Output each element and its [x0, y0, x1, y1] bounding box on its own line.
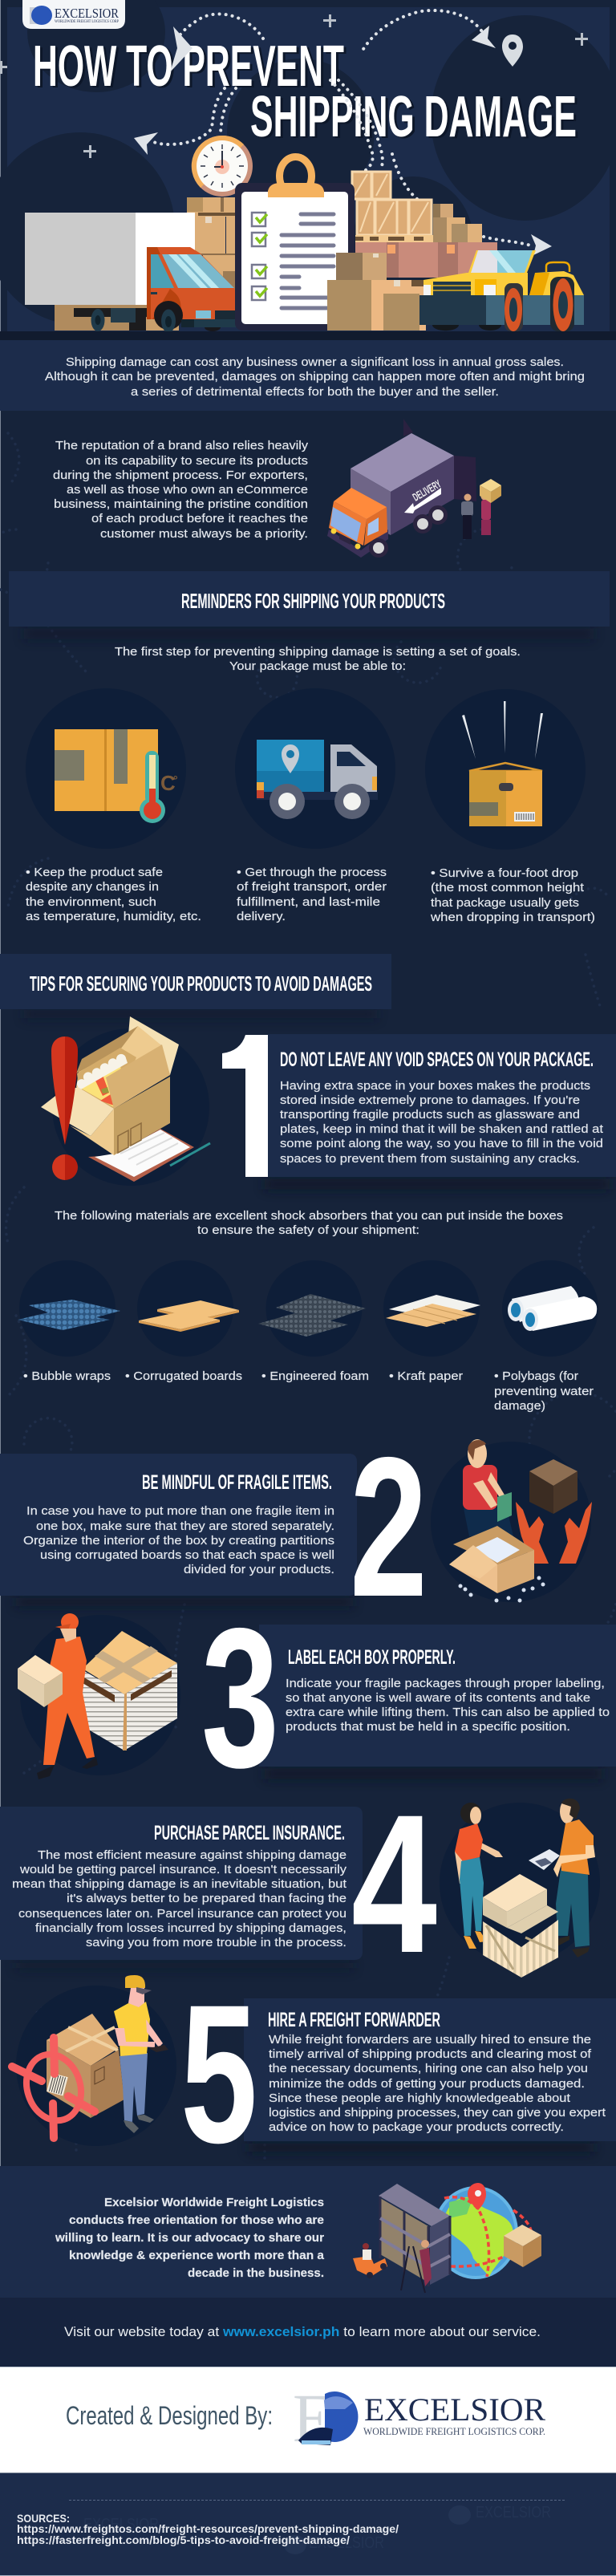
route dashes	[444, 2197, 532, 2277]
tip 2 body: using corrugated boards so that each space is well	[40, 1548, 334, 1562]
ladder and worker	[401, 2240, 432, 2293]
text block: first step	[115, 645, 521, 673]
title	[33, 34, 577, 149]
tip 1 body: spaces to prevent them from sustaining any cracks.	[280, 1152, 580, 1166]
goal 3 text: that package usually gets	[431, 896, 579, 910]
advocacy text: knowledge & experience worth more than a	[69, 2249, 325, 2262]
tip 5 body: advice on how to package your products correctly.	[269, 2120, 564, 2134]
goal 3: drop test	[425, 689, 586, 850]
panel: tip 1	[222, 1034, 616, 1177]
open box	[41, 1016, 179, 1155]
source links: https://fasterfreight.com/blog/5-tips-to-avoid-freight-damage/	[17, 2534, 350, 2546]
forklift	[353, 2243, 387, 2278]
goal 2: freight transport	[235, 688, 395, 849]
watermark logos	[83, 2504, 551, 2554]
hero background	[7, 7, 610, 331]
intro text	[45, 355, 585, 399]
red target reticle	[12, 2038, 95, 2138]
tip 4 body: consequences later on. Parcel insurance can protect you	[18, 1907, 346, 1921]
panel: reminders heading	[9, 571, 610, 627]
icon: box with thermometer	[55, 729, 178, 823]
cardboard box	[47, 2014, 124, 2118]
material: polybags: • Polybags (for	[494, 1369, 578, 1383]
tip 4 body: saving you from more trouble in the process.	[86, 1936, 346, 1949]
material: bubble wraps	[18, 1260, 120, 1383]
tip 3 body: Indicate your fragile packages through proper labeling,	[286, 1677, 605, 1690]
text block: brand reputation	[53, 439, 309, 541]
tip 4 body: mean that shipping damage is an inevitable situation, but	[12, 1877, 347, 1891]
tip 3 body: extra care while lifting them. This can also be applied to	[286, 1706, 610, 1719]
pallet	[55, 305, 179, 331]
tip 5 body: While freight forwarders are usually hired to ensure the	[269, 2033, 591, 2047]
tip 1 body: Having extra space in your boxes makes the products	[280, 1079, 590, 1093]
orange worker	[37, 1613, 98, 1779]
wooden crate	[483, 1874, 558, 1978]
crates right	[352, 172, 497, 278]
goal 2 text	[237, 866, 387, 923]
text block: materials intro	[55, 1209, 563, 1237]
intro text: a series of detrimental effects for both the buyer and the seller.	[131, 385, 499, 399]
clipboard and pencil	[88, 1129, 210, 1182]
advocacy text: Excelsior Worldwide Freight Logistics	[104, 2196, 324, 2209]
panel: visit website: Visit our website today at www.excelsior.ph to learn more about our service.	[64, 2324, 541, 2339]
foreground boxes	[327, 253, 426, 331]
tip 2 body	[23, 1504, 334, 1576]
brown box	[529, 1459, 578, 1514]
goal 2 text: fulfillment, and last-mile	[237, 895, 380, 909]
tip 1 body: plates, keep in mind that it will be shaken and rattled at	[280, 1122, 604, 1136]
tip 4 body: it's always better to be prepared than facing the	[67, 1892, 346, 1905]
panel: tip 5	[244, 1998, 616, 2141]
illustration: warehouse and globe	[353, 2183, 541, 2293]
checklist boxes	[252, 213, 265, 300]
tip 5 body: minimize the odds of getting your products damaged.	[269, 2077, 585, 2091]
logo badge	[22, 0, 125, 29]
material: bubble wraps: • Bubble wraps	[23, 1369, 111, 1383]
source links	[17, 2513, 399, 2546]
tip 5 body: logistics and shipping processes, they can give you expert	[269, 2106, 606, 2120]
title: HOW TO PREVENT	[33, 34, 344, 99]
number 2: 2	[350, 1415, 428, 1638]
arrowheads	[134, 26, 552, 255]
number 5: 5	[180, 1964, 257, 2185]
exclamation mark	[51, 1036, 78, 1180]
text block: materials intro: to ensure the safety of your shipment:	[197, 1223, 419, 1237]
goal 3 text: when dropping in transport)	[430, 911, 595, 924]
advocacy text: willing to learn. It is our advocacy to share our	[55, 2231, 324, 2245]
clipboard	[235, 156, 355, 331]
watermark logos: EXCELSIOR	[83, 2516, 159, 2533]
intro text: Shipping damage can cost any business owner a significant loss in annual gross sales.	[66, 355, 564, 369]
number 3: 3	[201, 1586, 279, 1809]
illustration: isometric delivery truck	[327, 419, 501, 558]
material: engineered foam: • Engineered foam	[261, 1369, 369, 1383]
text block: brand reputation: customer must always be a priority.	[100, 527, 308, 541]
small package	[480, 479, 501, 503]
goal 2 text: delivery.	[237, 910, 286, 923]
panel: credit: Created & Designed By:	[66, 2401, 273, 2430]
tip 4 body: The most efficient measure against shipping damage	[38, 1848, 346, 1862]
panel: tips heading	[0, 954, 391, 1009]
goal 3 text: (the most common height	[431, 881, 585, 895]
icon: blue truck	[257, 740, 378, 819]
tip 4 body	[12, 1848, 347, 1949]
tip 2 body: In case you have to put more than one fragile item in	[26, 1504, 334, 1518]
panel: tip 2: BE MINDFUL OF FRAGILE ITEMS.	[142, 1471, 332, 1494]
truck cab	[327, 488, 388, 558]
company logo: EXCELSIOR	[364, 2391, 545, 2428]
material: kraft paper	[383, 1260, 480, 1383]
material: kraft paper: • Kraft paper	[389, 1369, 463, 1383]
illustration: insurance discussion	[440, 1799, 600, 1978]
illustration: packing fragile items	[431, 1439, 592, 1603]
text block: first step: Your package must be able to:	[229, 659, 406, 673]
panel: tip 4: PURCHASE PARCEL INSURANCE.	[154, 1822, 345, 1844]
logo badge: EXCELSIOR	[55, 6, 120, 21]
tip 5 body	[269, 2033, 606, 2134]
green checks	[256, 214, 267, 296]
advocacy text	[55, 2196, 325, 2280]
tip 3 body: products that must be held in a specific position.	[286, 1720, 570, 1734]
advocacy text: decade in the business.	[188, 2266, 324, 2280]
icon: box with thermometer: °	[173, 773, 178, 786]
text block: first step: The first step for preventing shipping damage is setting a set of goals.	[115, 645, 521, 659]
tip 2 body: Organize the interior of the box by creating partitions	[23, 1534, 334, 1548]
packing peanuts	[459, 1576, 545, 1603]
panel: tip 5: HIRE A FREIGHT FORWARDER	[268, 2009, 440, 2031]
material: corrugated boards	[125, 1260, 242, 1383]
worker	[463, 1439, 513, 1536]
hero panel	[0, 0, 616, 332]
clipboard clip	[268, 156, 324, 197]
panel: sources	[0, 2473, 616, 2576]
truck rear wheels	[413, 505, 448, 533]
panel: tip 2	[0, 1454, 357, 1596]
panel: tip 4	[0, 1807, 363, 1960]
tip 2 body: divided for your products.	[184, 1563, 334, 1576]
logo badge: WORLDWIDE FREIGHT LOGISTICS CORP	[55, 20, 119, 24]
tip 1 body: some point along the way, so you have to fill in the void	[280, 1137, 603, 1150]
goal 1 text	[26, 866, 201, 923]
tip 5 body: the necessary documents, hiring one can also help you	[269, 2062, 588, 2075]
goal 3 text	[430, 866, 595, 924]
text block: brand reputation: of each product before it reaches the	[91, 512, 308, 525]
material: polybags: damage)	[494, 1399, 545, 1413]
tip 5 body: Since these people are highly knowledgeable about	[269, 2091, 571, 2105]
illustration: worker with target	[12, 1975, 176, 2146]
tip 3 body	[286, 1677, 610, 1734]
stacked boxes behind truck	[187, 197, 235, 297]
tip 1 body	[280, 1079, 604, 1166]
map pin	[468, 2183, 486, 2210]
truck cargo box	[25, 213, 195, 305]
labelled crate	[80, 1631, 177, 1750]
text block: brand reputation: during the shipment process. For exporters,	[53, 469, 308, 482]
panel: intro	[0, 340, 616, 411]
globe	[433, 2186, 518, 2279]
goal 3 text: • Survive a four-foot drop	[431, 866, 578, 880]
carried box	[18, 1655, 63, 1707]
open box with filler	[449, 1526, 534, 1593]
advocacy text: conducts free orientation for those who are	[69, 2213, 324, 2227]
material: engineered foam	[258, 1260, 369, 1383]
truck cab	[147, 247, 245, 332]
company logo	[293, 2379, 545, 2456]
dotted route lines	[152, 10, 531, 245]
woman	[455, 1803, 503, 1949]
illustration: worker and crate	[18, 1613, 180, 1779]
panel: company advocacy	[0, 2166, 616, 2298]
yellow worker	[114, 1975, 168, 2133]
goal 1 text: the environment, such	[26, 895, 156, 909]
panel: tip 3	[259, 1625, 616, 1767]
text block: brand reputation: on its capability to secure its products	[86, 454, 308, 468]
text block: materials intro: The following materials are excellent shock absorbers that you can put inside the boxes	[55, 1209, 563, 1223]
company logo: WORLDWIDE FREIGHT LOGISTICS CORP.	[363, 2425, 545, 2437]
icon: box with thermometer: C	[160, 771, 176, 795]
tip 1 body: transporting fragile products such as glassware and	[280, 1108, 580, 1122]
icon: falling box	[462, 701, 543, 826]
number 1	[222, 1035, 268, 1177]
panel: tip 3: LABEL EACH BOX PROPERLY.	[288, 1646, 456, 1669]
goal 1 text: as temperature, humidity, etc.	[26, 910, 201, 923]
plus marks	[0, 14, 588, 158]
intro text: Although it can be prevented, damages on shipping can happen more often and might bring	[45, 370, 585, 383]
watermark logos: EXCELSIOR	[309, 2534, 384, 2552]
icon: location pin	[502, 34, 523, 67]
source links: SOURCES:	[17, 2513, 70, 2525]
company logo: E	[293, 2379, 333, 2456]
tip 4 body: financially from losses incurred by shipping damages,	[35, 1921, 346, 1935]
text block: brand reputation: business, maintaining the pristine condition	[54, 497, 308, 511]
tip 5 body: timely arrival of shipping products and clearing most of	[269, 2047, 592, 2061]
icon: clock	[192, 136, 253, 197]
tip 1 body: stored inside extremely prone to damages. If you're	[280, 1093, 580, 1107]
text block: brand reputation: as well as those who own an eCommerce	[67, 483, 308, 497]
goal 2 text: of freight transport, order	[237, 880, 387, 894]
material: polybags	[494, 1260, 598, 1413]
tip 2 body: one box, make sure that they are stored separately.	[36, 1519, 334, 1533]
shelving	[379, 2184, 450, 2286]
material: corrugated boards: • Corrugated boards	[125, 1369, 242, 1383]
material: polybags: preventing water	[494, 1385, 594, 1398]
panel: visit website	[0, 2298, 616, 2367]
parcel	[504, 2225, 541, 2267]
hero background blobs	[0, 0, 616, 325]
goal 1 text: despite any changes in	[26, 880, 159, 894]
tip 3 body: so that anyone is well aware of its contents and take	[286, 1691, 590, 1705]
goal 1: temperature	[26, 688, 186, 849]
number 4: 4	[351, 1774, 437, 1994]
checklist lines	[282, 214, 334, 308]
illustration: isometric delivery truck: DELIVERY	[411, 477, 444, 504]
goal 1 text: • Keep the product safe	[26, 866, 163, 879]
tip 4 body: would be getting parcel insurance. It doesn't necessarily	[19, 1863, 347, 1876]
yellow forklift	[419, 250, 584, 331]
source links: https://www.freightos.com/freight-resources/prevent-shipping-damage/	[17, 2523, 399, 2535]
courier figures	[461, 493, 491, 539]
illustration: open box with exclamation mark	[41, 1016, 210, 1186]
panel: credit	[0, 2367, 616, 2473]
watermark logos: EXCELSIOR	[476, 2504, 551, 2521]
man with document	[529, 1799, 595, 1957]
text block: brand reputation: The reputation of a brand also relies heavily	[55, 439, 309, 452]
protective hands	[516, 1502, 592, 1564]
delivery truck	[25, 213, 245, 332]
goal 2 text: • Get through the process	[237, 866, 387, 879]
